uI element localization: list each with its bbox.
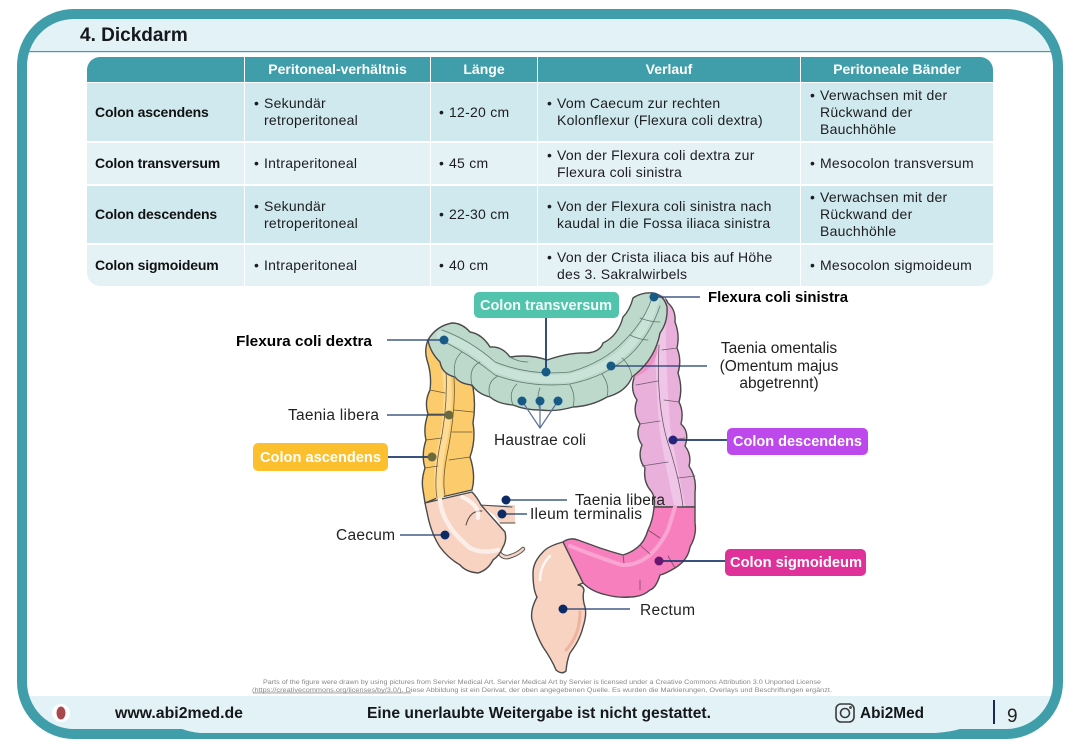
row: colon transversum: Flexura coli sinistra: [557, 164, 682, 180]
label: Taenia libera right: Taenia libera: [575, 492, 665, 509]
colon descendens drawing: [633, 296, 695, 507]
row: colon descendens: [87, 186, 993, 243]
image credit: [252, 679, 832, 694]
label: Haustrae coli: Haustrae coli: [494, 432, 586, 449]
label: Colon transversum: Colon transversum: [480, 298, 612, 314]
table header row: Verlauf: [646, 61, 692, 77]
row: colon ascendens: Sekundär: [264, 95, 326, 111]
title: 4. Dickdarm: [80, 25, 188, 46]
label: Taenia omentalis: abgetrennt): [739, 375, 819, 392]
row: colon transversum: Intraperitoneal: [264, 155, 357, 171]
label: Colon ascendens: Colon ascendens: [260, 450, 381, 466]
table: colon segments: [87, 57, 993, 286]
label: Caecum: Caecum: [336, 527, 395, 544]
row: colon descendens: 22-30 cm: [449, 206, 509, 222]
row: colon sigmoideum: Colon sigmoideum: [95, 257, 219, 273]
marker dots: [428, 292, 678, 614]
table header row: Peritoneal-verhältnis: [268, 61, 407, 77]
row: colon descendens: retroperitoneal: [264, 214, 358, 230]
label: Flexura coli sinistra: Flexura coli sinistra: [708, 289, 849, 306]
table header row: [87, 57, 993, 82]
row: colon transversum: 45 cm: [449, 155, 488, 171]
label: Rectum: Rectum: [640, 602, 695, 619]
row: colon descendens: kaudal in die Fossa iliaca sinistra: [557, 214, 770, 230]
colon ascendens drawing: [422, 340, 474, 503]
row: colon ascendens: Bauchhöhle: [820, 120, 896, 136]
image credit: (https://creativecommons.org/licenses/by/3.0/). Diese Abbildung ist ein Derivat, der oben angegebenen Quelle. Es wurden die Markierungen, Overlays und Beschriftungen ergänzt.: [252, 687, 832, 694]
colon drawing: [422, 293, 695, 673]
label: Colon descendens: Colon descendens: [733, 434, 862, 450]
caecum drawing: [425, 492, 523, 573]
row: colon descendens: Sekundär: [264, 198, 326, 214]
page divider: [993, 700, 995, 724]
rectum drawing: [532, 542, 586, 673]
colon transversum drawing: [428, 293, 667, 411]
row: colon descendens: Verwachsen mit der: [820, 189, 947, 205]
footer: [52, 700, 1018, 727]
logo: [52, 704, 70, 722]
label: Flexura coli dextra: Flexura coli dextra: [236, 333, 373, 350]
row: colon descendens: Von der Flexura coli sinistra nach: [557, 198, 772, 214]
row: colon sigmoideum: Mesocolon sigmoideum: [820, 257, 972, 273]
row: colon descendens: Bauchhöhle: [820, 223, 896, 239]
label: Colon descendens: [727, 428, 868, 455]
row: colon descendens: Colon descendens: [95, 206, 217, 222]
connector lines: [387, 297, 727, 609]
row: colon transversum: Colon transversum: [95, 155, 220, 171]
label: Taenia omentalis: Taenia omentalis: [721, 340, 837, 357]
row: colon sigmoideum: des 3. Sakralwirbels: [557, 266, 687, 282]
label: Colon transversum: [474, 292, 619, 318]
row: colon transversum: [87, 143, 993, 184]
row: colon sigmoideum: Von der Crista iliaca bis auf Höhe: [557, 248, 772, 264]
icon: instagram: [836, 704, 854, 722]
website: www.abi2med.de: [114, 705, 243, 722]
label: Colon sigmoideum: Colon sigmoideum: [730, 555, 862, 571]
row: colon ascendens: [87, 83, 993, 141]
row: colon ascendens: 12-20 cm: [449, 104, 509, 120]
row: colon ascendens: Rückwand der: [820, 104, 912, 120]
row: colon ascendens: Colon ascendens: [95, 104, 209, 120]
row: colon transversum: Von der Flexura coli dextra zur: [557, 146, 755, 162]
label: Taenia libera left: Taenia libera: [288, 407, 379, 424]
label: Colon ascendens: [253, 443, 388, 471]
row: colon ascendens: Vom Caecum zur rechten: [557, 95, 720, 111]
label: Ileum terminalis: Ileum terminalis: [530, 506, 642, 523]
social handle: Abi2Med: [860, 705, 924, 722]
row: colon ascendens: Verwachsen mit der: [820, 86, 947, 102]
row: colon sigmoideum: [87, 245, 993, 286]
row: colon transversum: Mesocolon transversum: [820, 155, 974, 171]
colon sigmoideum drawing: [563, 507, 695, 597]
table header row: Peritoneale Bänder: [833, 61, 961, 77]
label: Taenia omentalis: (Omentum majus: [720, 358, 839, 375]
row: colon ascendens: Kolonflexur (Flexura coli dextra): [557, 112, 763, 128]
image credit: Parts of the figure were drawn by using pictures from Servier Medical Art. Servier Medical Art by Servier is licensed under a Creative Commons Attribution 3.0 Unported License: [263, 679, 821, 686]
row: colon sigmoideum: Intraperitoneal: [264, 257, 357, 273]
row: colon sigmoideum: 40 cm: [449, 257, 488, 273]
page number: 9: [1007, 706, 1018, 727]
table header row: Länge: [463, 61, 505, 77]
row: colon descendens: Rückwand der: [820, 206, 912, 222]
copyright notice: Eine unerlaubte Weitergabe ist nicht gestattet.: [367, 705, 711, 722]
row: colon ascendens: retroperitoneal: [264, 112, 358, 128]
label: Colon sigmoideum: [725, 549, 866, 576]
